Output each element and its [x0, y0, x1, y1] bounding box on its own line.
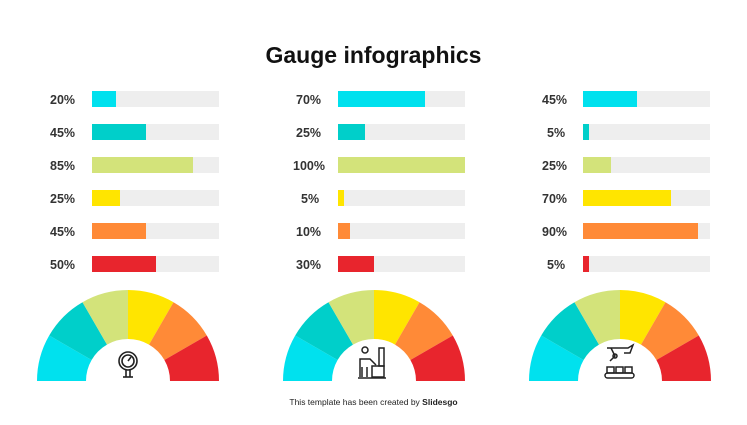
panel: column 1 bars: 45%: [50, 126, 75, 140]
panel: column 3 bars: 25%: [542, 159, 567, 173]
panel: column 2 bars: 70%: [296, 93, 321, 107]
panel: column 1 bars: 25%: [50, 192, 75, 206]
panel: column 2 bars: 5%: [301, 192, 319, 206]
panel: column 1 bars: 45%: [50, 225, 75, 239]
title: Gauge infographics: [266, 42, 481, 68]
panel: column 3 bars: 45%: [542, 93, 567, 107]
icon: pressure gauge: [119, 352, 137, 377]
gauge 2: [283, 290, 465, 381]
icon: worker at machine: [358, 347, 386, 378]
icon: conveyor robot: [605, 345, 634, 378]
panel: column 3 bars: [542, 91, 710, 272]
panel: column 1 bars: 50%: [50, 258, 75, 272]
panel: column 2 bars: 25%: [296, 126, 321, 140]
panel: column 2 bars: 100%: [293, 159, 325, 173]
panel: column 2 bars: [293, 91, 465, 272]
footer credit: This template has been created by Slidesgo: [289, 397, 458, 407]
panel: column 1 bars: [50, 91, 219, 272]
panel: column 2 bars: 30%: [296, 258, 321, 272]
panel: column 3 bars: 5%: [547, 258, 565, 272]
gauge 3: [529, 290, 711, 381]
panel: column 1 bars: 20%: [50, 93, 75, 107]
panel: column 1 bars: 85%: [50, 159, 75, 173]
panel: column 3 bars: 70%: [542, 192, 567, 206]
panel: column 3 bars: 5%: [547, 126, 565, 140]
panel: column 3 bars: 90%: [542, 225, 567, 239]
panel: column 2 bars: 10%: [296, 225, 321, 239]
gauge 1: [37, 290, 219, 381]
